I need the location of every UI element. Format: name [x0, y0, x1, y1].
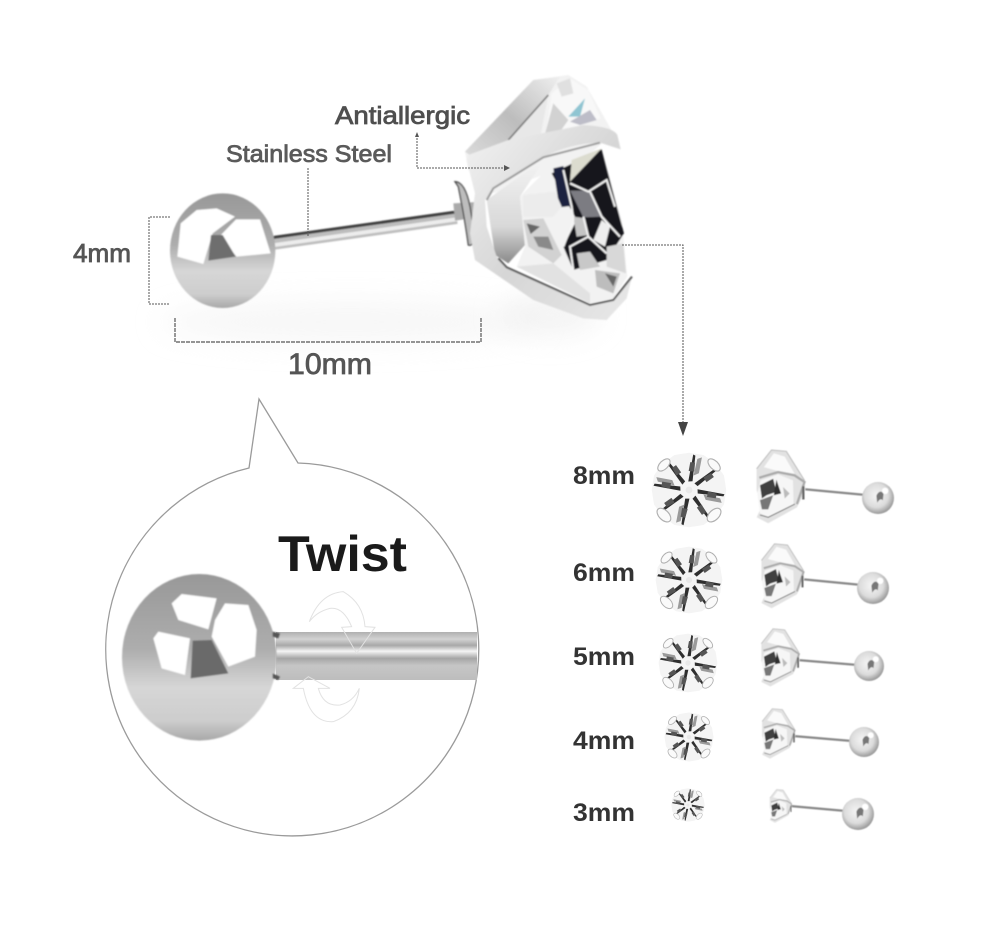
cup interior — [487, 158, 545, 263]
upper prong and gem — [465, 75, 613, 193]
size label: 6mm — [573, 559, 635, 587]
earring post — [272, 212, 457, 245]
label: 10mm post length: 10mm — [288, 348, 372, 381]
front view gem — [659, 634, 717, 692]
dimension bracket: 10mm — [175, 318, 481, 342]
dotted leader: gem to size list — [622, 245, 688, 436]
size label: 3mm — [573, 799, 635, 827]
size row: 8mm — [573, 450, 894, 527]
size label: 5mm — [573, 643, 635, 671]
enlarged post — [276, 632, 477, 680]
enlarged ball — [122, 574, 280, 741]
label: Antiallergic: Antiallergic — [335, 102, 470, 130]
side view earring — [761, 629, 884, 686]
twist enlargement — [122, 574, 477, 741]
size row: 5mm — [573, 629, 884, 692]
earring ball — [170, 193, 275, 308]
label: Twist: Twist — [278, 526, 407, 582]
twist rotation arrows — [293, 592, 375, 722]
dotted leader: Antiallergic — [415, 132, 510, 171]
dimension bracket: 4mm — [149, 217, 170, 304]
front view gem — [652, 453, 726, 527]
lower gem facets — [517, 148, 627, 303]
side view earring — [762, 709, 879, 759]
label: 4mm ball size: 4mm — [73, 238, 131, 268]
washer — [453, 182, 483, 245]
main earring — [160, 75, 632, 342]
label: Stainless Steel: Stainless Steel — [226, 141, 392, 168]
dotted leader: Stainless Steel — [307, 168, 309, 236]
size row: 6mm — [573, 544, 889, 613]
size row: 3mm — [573, 788, 874, 830]
front view gem — [671, 788, 705, 822]
size label: 4mm — [573, 727, 635, 755]
front view gem — [664, 712, 714, 762]
size row: 4mm — [573, 709, 879, 762]
front band and prongs — [467, 125, 632, 320]
side view earring — [757, 450, 894, 523]
twist callout bubble — [106, 399, 479, 836]
front view gem — [656, 547, 722, 613]
side view earring — [770, 789, 874, 830]
size label: 8mm — [573, 462, 635, 490]
side view earring — [761, 544, 889, 608]
